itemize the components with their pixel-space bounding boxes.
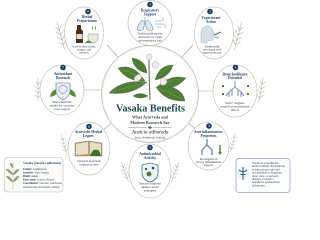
sprig 2 bbox=[231, 21, 245, 51]
panel 5: antimicrobial activity: Extracts explored bbox=[139, 182, 161, 186]
profile heading: Vasaka (Justicia adhatoda) bbox=[23, 161, 61, 165]
icon: bronchi bbox=[202, 139, 212, 155]
sprig 7 bbox=[35, 78, 41, 102]
icon: cough arrow bbox=[214, 32, 221, 35]
botanical name: Justicia adhatoda bbox=[131, 130, 169, 136]
icon: bronchi bbox=[226, 81, 244, 97]
panel 3: bronchodilation potential: Bronchodilation bbox=[223, 72, 247, 76]
panel 1: respiratory support bbox=[128, 0, 172, 46]
profile facts bbox=[23, 168, 63, 189]
disclaimer text: healthcare professional bbox=[252, 180, 280, 184]
panel 8: herbal preparations: Preparations bbox=[77, 19, 98, 23]
panel 7: antioxidant research bbox=[40, 65, 84, 115]
panel 1: respiratory support: Ayurveda for cough bbox=[138, 35, 162, 39]
icon: air swirl bbox=[155, 18, 166, 28]
sprig 5 right bbox=[169, 161, 181, 183]
title: Vasaka Benefits bbox=[116, 104, 185, 114]
profile facts: Parts used: Leaves, flowers bbox=[23, 178, 54, 182]
disclaimer text: disease. Consult a bbox=[252, 177, 274, 181]
sprig 5 left bbox=[119, 161, 131, 183]
disclaimer text bbox=[252, 161, 285, 187]
disclaimer text: before use. bbox=[252, 183, 265, 187]
icon: leaves bbox=[50, 89, 76, 97]
panel 4: anti-inflammatory properties: Investigated in bbox=[200, 157, 218, 161]
icon: herb sprig bbox=[6, 162, 19, 190]
panel 2: expectorant action: Expectorant bbox=[202, 16, 221, 20]
panel 7: antioxidant research: Phytochemicals bbox=[52, 100, 72, 104]
panel 4: anti-inflammatory properties: support bbox=[204, 163, 213, 167]
profile facts: Hindi: Adusa bbox=[23, 175, 39, 178]
profile facts: essential oils, flavonoids, tannins bbox=[23, 186, 59, 189]
panel 7: antioxidant research: 7 bbox=[62, 66, 64, 70]
panel 2: expectorant action: associated with bbox=[203, 48, 222, 52]
panel 7: antioxidant research: Antioxidant bbox=[54, 72, 73, 76]
subtitle: Modern Research Say bbox=[130, 120, 171, 125]
profile facts: Sanskrit: Vasa, Vasaka bbox=[23, 172, 50, 174]
panel 1: respiratory support: Respiratory bbox=[141, 8, 159, 12]
panel 2: expectorant action: 2 bbox=[209, 10, 211, 14]
profile facts: Family: Acanthaceae bbox=[23, 168, 48, 171]
subtitle bbox=[130, 114, 171, 125]
panel 2: expectorant action: Traditionally bbox=[204, 44, 220, 48]
disclaimer text: is educational only and bbox=[252, 167, 280, 171]
icon: head profile bbox=[201, 26, 215, 43]
panel 2: expectorant action: expectorant use bbox=[203, 50, 222, 54]
icon: caduceus bbox=[236, 166, 250, 180]
plant illustration bbox=[109, 54, 186, 101]
panel 6: ayurvedic herbal legacy: Legacy bbox=[83, 134, 94, 138]
panel 4: anti-inflammatory properties: airway inflammation bbox=[196, 160, 222, 164]
icon: shield with microbes bbox=[142, 163, 158, 182]
panel 4: anti-inflammatory properties: 4 bbox=[208, 124, 210, 128]
disclaimer card bbox=[236, 158, 290, 192]
panel 5: antimicrobial activity: Activity bbox=[144, 156, 156, 160]
panel 3: bronchodilation potential: Early+ suggests bbox=[225, 101, 245, 105]
panel 4: anti-inflammatory properties: Properties bbox=[201, 134, 217, 138]
panel 8: herbal preparations bbox=[64, 7, 104, 59]
panel 5: antimicrobial activity: 5 bbox=[149, 146, 151, 150]
panel 3: bronchodilation potential: 3 bbox=[235, 66, 237, 70]
panel 7: antioxidant research: studied for oxidative bbox=[50, 104, 75, 108]
synonym: (syn. Adhatoda vasica) bbox=[135, 136, 165, 140]
icon: lungs bbox=[137, 17, 153, 30]
panel 5: antimicrobial activity: Antimicrobial bbox=[139, 152, 161, 156]
icon: syrup bottle bbox=[76, 25, 83, 43]
panel 1: respiratory support: Traditionally used in bbox=[138, 32, 163, 36]
sprig 4 bbox=[228, 133, 238, 153]
disclaimer text: Vasaka is a traditional bbox=[252, 161, 279, 165]
panel 2: expectorant action bbox=[194, 7, 234, 59]
subtitle: What Ayurveda and bbox=[132, 114, 169, 120]
panel 5: antimicrobial activity bbox=[129, 144, 171, 198]
profile facts: Constituents: vasicine, vasicinone, bbox=[23, 182, 63, 185]
panel 6: ayurvedic herbal legacy: Ayurvedic Herbal bbox=[75, 130, 102, 134]
panel 1: respiratory support: and respiratory care bbox=[138, 38, 163, 42]
panel 8: herbal preparations: syrups, and bbox=[77, 48, 91, 52]
panel 7: antioxidant research: Research bbox=[56, 76, 70, 80]
sprig 8 bbox=[54, 21, 68, 51]
connector lines bbox=[84, 45, 213, 130]
panel 4: anti-inflammatory properties bbox=[188, 122, 229, 170]
panel 3: bronchodilation potential: Potential bbox=[228, 76, 242, 80]
icon: molecular shield bbox=[56, 83, 70, 100]
panel 3: bronchodilation potential: effects bbox=[231, 108, 240, 112]
panel 6: ayurvedic herbal legacy: Classical Ayurvedic bbox=[77, 159, 102, 163]
panel 3: bronchodilation potential: possible bronchodilation bbox=[220, 104, 250, 108]
sprig 3 bbox=[255, 77, 267, 103]
panel 8: herbal preparations: extracts bbox=[79, 50, 89, 54]
panel 8: herbal preparations: 8 bbox=[87, 10, 89, 14]
panel 5: antimicrobial activity: pathogens bbox=[144, 188, 157, 192]
panel 3: bronchodilation potential bbox=[213, 65, 257, 117]
icon: down arrow bbox=[219, 145, 221, 152]
panel 1: respiratory support: 1 bbox=[149, 3, 151, 7]
disclaimer text: treat, cure, or prevent bbox=[252, 174, 278, 179]
icon: dots bbox=[222, 85, 249, 95]
panel 5: antimicrobial activity: against certain bbox=[141, 185, 159, 189]
panel 4: anti-inflammatory properties: Anti-inflammatory bbox=[194, 130, 223, 134]
sprig 6 bbox=[58, 134, 70, 156]
panel 1: respiratory support: Support bbox=[144, 12, 157, 16]
icon: old book and herb bbox=[75, 141, 102, 156]
icon: tea cup and herbs bbox=[88, 34, 98, 43]
panel 6: ayurvedic herbal legacy: 6 bbox=[88, 125, 90, 129]
disclaimer text: not intended to diagnose, bbox=[252, 171, 282, 176]
disclaimer text: herbal remedy. Information bbox=[252, 164, 285, 168]
panel 8: herbal preparations: Used in decoctions, bbox=[72, 44, 96, 50]
center panel bbox=[102, 46, 198, 142]
panel 7: antioxidant research: stress support bbox=[54, 107, 70, 111]
panel 6: ayurvedic herbal legacy: respiratory herb bbox=[79, 162, 99, 166]
panel 6: ayurvedic herbal legacy bbox=[68, 122, 110, 175]
panel 8: herbal preparations: Herbal bbox=[82, 15, 92, 19]
profile card bbox=[4, 158, 63, 192]
panel 2: expectorant action: Action bbox=[206, 20, 216, 24]
ornament divider bbox=[128, 126, 172, 129]
